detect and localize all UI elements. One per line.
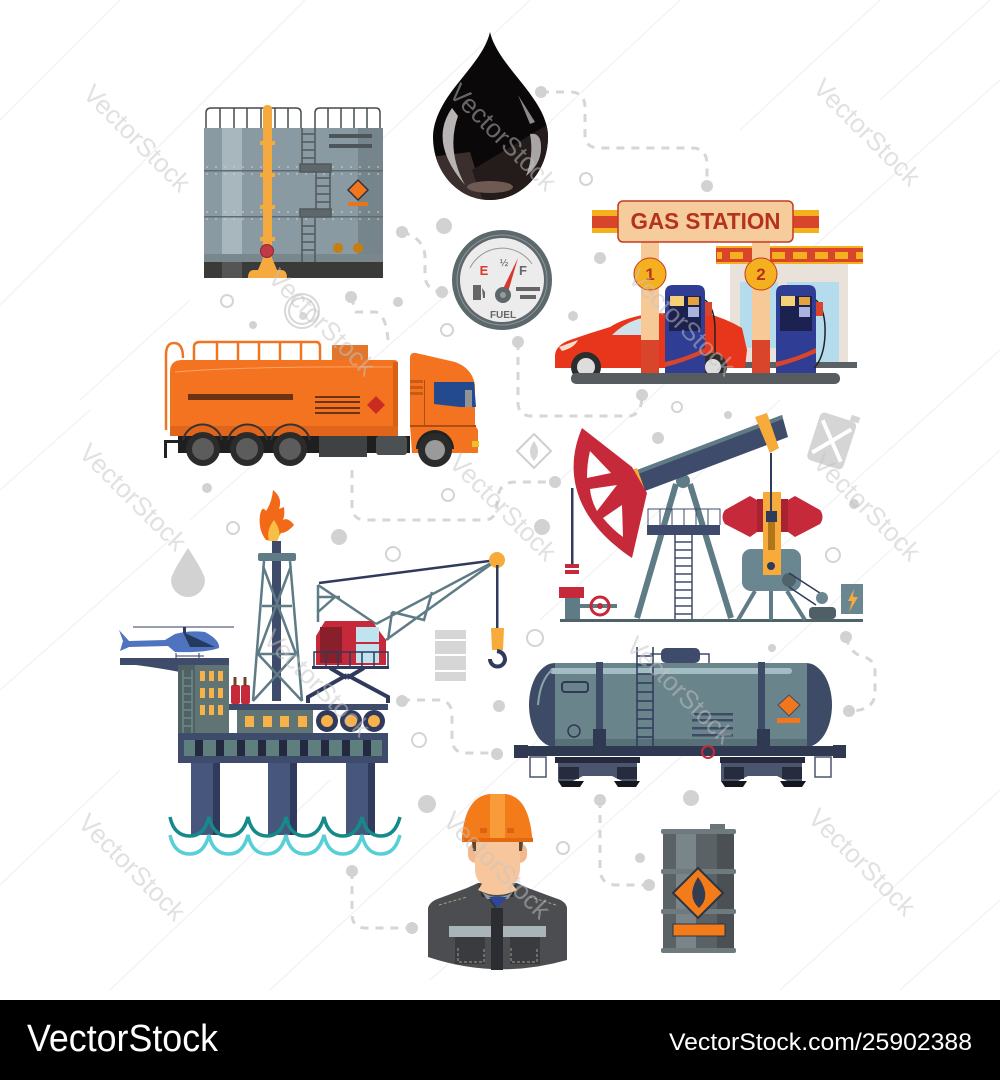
watermark: VectorStock xyxy=(622,262,742,382)
gas cylinders xyxy=(231,677,250,704)
fuel truck xyxy=(164,342,479,467)
watermark xyxy=(72,72,927,927)
watermark: VectorStock xyxy=(77,78,197,198)
helideck xyxy=(120,658,229,673)
footer bar: VectorStock xyxy=(27,1018,219,1060)
watermark: VectorStock xyxy=(443,77,563,197)
icon: faint jerrycan xyxy=(806,406,860,471)
fuel gauge: ½ xyxy=(500,258,509,269)
fuel gauge: F xyxy=(519,263,527,278)
watermark: VectorStock xyxy=(807,72,927,192)
fuel gauge: FUEL xyxy=(490,310,516,321)
watermark: VectorStock xyxy=(620,630,740,750)
stairs xyxy=(300,128,331,262)
watermark: VectorStock xyxy=(807,447,927,567)
gas station sign: GAS STATION xyxy=(630,208,780,234)
watermark: VectorStock xyxy=(262,262,382,382)
decorative dots xyxy=(202,86,859,934)
pump 1 xyxy=(665,285,715,373)
derrick xyxy=(253,541,302,701)
pillars xyxy=(641,242,770,373)
fuel gauge xyxy=(452,230,552,330)
gearbox and motor xyxy=(738,492,836,620)
pump jack xyxy=(559,413,863,622)
decorative rings xyxy=(221,173,840,854)
crane xyxy=(318,552,505,666)
shop building xyxy=(716,246,863,368)
accommodation block xyxy=(178,665,229,733)
process deck xyxy=(229,704,388,733)
oil barrel xyxy=(661,824,736,953)
crane cabin xyxy=(308,621,389,703)
icon: faint flame diamond xyxy=(517,434,551,468)
horsehead xyxy=(574,428,647,558)
offshore platform xyxy=(119,490,505,854)
pump 2 xyxy=(776,285,825,373)
beam xyxy=(623,413,788,498)
sign bands xyxy=(592,210,819,233)
tank rails xyxy=(166,342,320,430)
derrick xyxy=(637,484,731,618)
sea waves xyxy=(170,817,400,854)
flame xyxy=(260,490,294,541)
helicopter xyxy=(119,627,234,658)
gas station sign xyxy=(618,201,793,242)
watermark: VectorStock xyxy=(802,802,922,922)
platform xyxy=(647,509,720,535)
footer bar xyxy=(0,1000,1000,1080)
main deck xyxy=(178,733,388,763)
icon: faint drop xyxy=(171,548,205,597)
wheels xyxy=(183,424,454,467)
watermark: VectorStock xyxy=(257,623,377,743)
gas station xyxy=(555,201,863,384)
cab xyxy=(410,353,479,453)
bogies xyxy=(555,757,806,787)
dashed connectors xyxy=(351,92,875,928)
watermark: VectorStock xyxy=(437,805,557,925)
pump numbers: 1 xyxy=(645,265,655,284)
oil storage tank xyxy=(204,105,383,278)
red car xyxy=(555,313,747,382)
wellhead xyxy=(559,564,617,619)
oil worker xyxy=(428,794,567,970)
rail tank car xyxy=(514,647,846,787)
icon: faint gauge xyxy=(285,294,319,328)
pipe xyxy=(248,105,287,278)
legs xyxy=(191,763,375,835)
watermark: VectorStock xyxy=(72,807,192,927)
fuel gauge: E xyxy=(480,263,489,278)
ladder xyxy=(675,535,692,619)
pump numbers xyxy=(634,258,777,290)
watermark: VectorStock xyxy=(73,437,193,557)
watermark: VectorStock xyxy=(443,447,563,567)
footer bar: VectorStock.com/25902388 xyxy=(669,1029,972,1056)
forecourt xyxy=(571,373,840,384)
icon: faint barrel xyxy=(435,630,466,681)
pump numbers: 2 xyxy=(756,265,766,284)
electrical box xyxy=(841,584,863,614)
oil drop xyxy=(430,32,552,204)
counterweight xyxy=(722,496,822,537)
